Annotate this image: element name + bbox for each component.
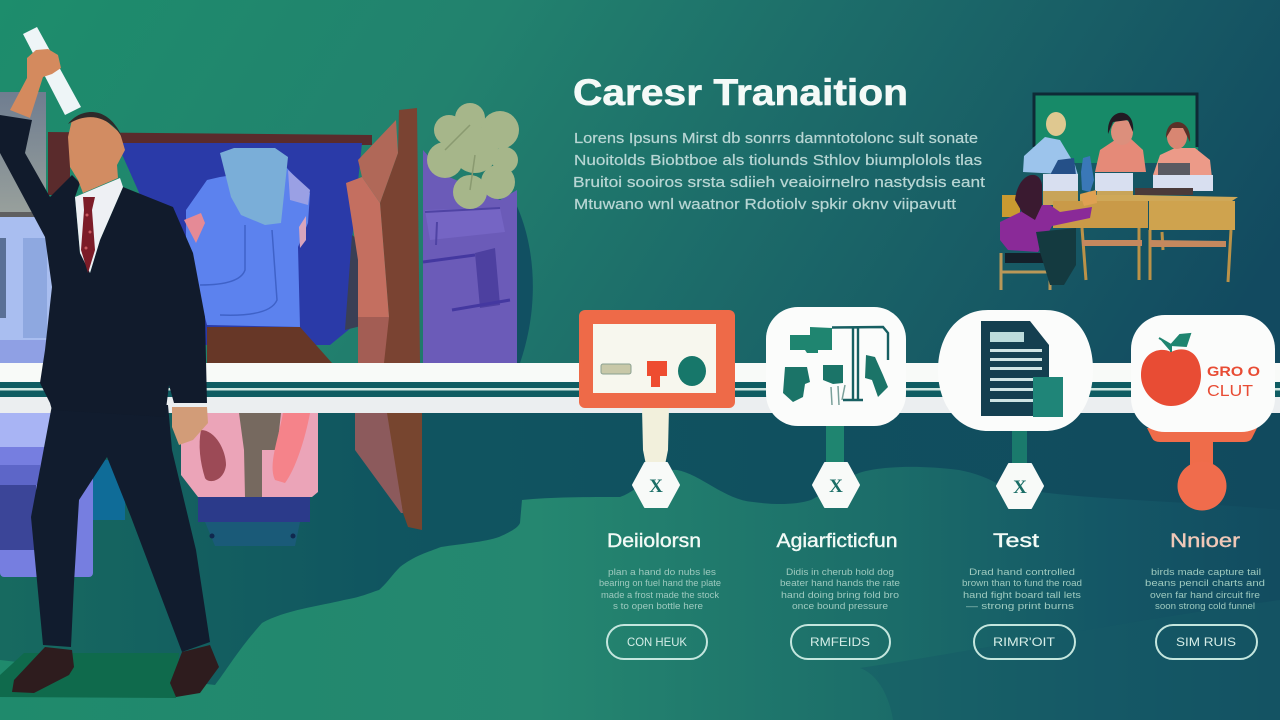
- head: [68, 113, 125, 193]
- hair: [68, 112, 122, 137]
- lower left purple block: [0, 413, 125, 577]
- step 1 marker: [633, 463, 679, 507]
- blue figure: [184, 148, 310, 327]
- description: — strong print burns: [966, 601, 1075, 611]
- classroom illustration: [1000, 93, 1238, 290]
- title: Caresr Tranaition: [573, 72, 908, 113]
- step 1 marker: X: [649, 476, 663, 497]
- lower pink panel: [181, 413, 318, 497]
- heading: Test: [993, 531, 1040, 552]
- brown desk: [207, 327, 332, 363]
- desks: [1043, 191, 1238, 282]
- description: beater hand hands the rate: [780, 578, 900, 588]
- left gray cabinet: [0, 92, 46, 218]
- hair: [1015, 175, 1042, 220]
- description: s to open bottle here: [613, 601, 703, 611]
- description: hand fight board tall lets: [963, 590, 1082, 600]
- tie: [81, 197, 95, 273]
- legs: [31, 405, 210, 652]
- dark side panel: [345, 235, 365, 330]
- intro paragraph: Nuoitolds Biobtboe als tiolunds Sthlov biumplolols tlas: [574, 152, 982, 169]
- hand and book: [1080, 190, 1097, 206]
- intro paragraph: Mtuwano wnl waatnor Rdotiolv spkir oknv viipavutt: [574, 196, 957, 213]
- illustration: office scene: [0, 92, 533, 577]
- hand: [172, 407, 208, 445]
- description: once bound pressure: [792, 601, 888, 611]
- green wave: [0, 467, 1280, 720]
- description: plan a hand do nubs les: [608, 567, 717, 577]
- navy bench: [198, 497, 310, 546]
- step 4 text: [1145, 531, 1265, 659]
- blue wall panel: [117, 143, 362, 345]
- intro paragraph: Bruitoi sooiros srsta sdiieh veaioirnelro nastydsis eant: [573, 174, 986, 191]
- button: SIM RUIS: [1176, 635, 1236, 649]
- paper roll: [23, 27, 81, 115]
- step 3 card: [938, 310, 1093, 431]
- teacher middle: [1095, 113, 1146, 172]
- floor shadow: [0, 653, 179, 698]
- step 3 marker: [997, 464, 1043, 508]
- description: [599, 567, 721, 611]
- presenter figure: [0, 27, 219, 698]
- description: oven far hand circuit fire: [1150, 590, 1260, 600]
- chalkboard: [1033, 93, 1198, 163]
- step 2 marker: [813, 463, 859, 507]
- connector stems: [642, 408, 1213, 473]
- step 1 card: [579, 310, 735, 408]
- step 4 card: [1131, 315, 1275, 442]
- heading: Nnioer: [1170, 531, 1241, 552]
- step 2 card: [766, 307, 906, 426]
- trousers: [1036, 228, 1076, 285]
- description: Drad hand controlled: [969, 567, 1075, 577]
- blue bottle: [1081, 156, 1094, 192]
- description: bearing on fuel hand the plate: [599, 578, 721, 588]
- step 4 card: GRO O: [1207, 363, 1260, 379]
- step 4 marker: [1178, 462, 1226, 510]
- description: [962, 567, 1082, 611]
- description: Didis in cherub hold dog: [786, 567, 894, 577]
- description: made a frost made the stock: [601, 590, 720, 600]
- description: soon strong cold funnel: [1155, 601, 1255, 611]
- heading: Deiiolorsn: [607, 531, 701, 552]
- step 3 text: [962, 531, 1082, 659]
- heading: Agiarficticfun: [776, 531, 898, 552]
- curtain and door post: [346, 108, 420, 363]
- step 1 text: [599, 531, 721, 659]
- timeline bar: [0, 363, 1280, 413]
- purple top: [1000, 205, 1092, 252]
- description: [780, 567, 900, 611]
- button: RIMR'OIT: [993, 635, 1056, 649]
- lower door post: [355, 413, 422, 530]
- chair: [1002, 195, 1020, 217]
- seated student: [1000, 175, 1097, 290]
- teacher right: [1153, 122, 1212, 178]
- dark teal lower field: [0, 413, 1280, 720]
- step 2 marker: X: [829, 476, 843, 497]
- raised arm: [10, 49, 61, 118]
- intro paragraph: Lorens Ipsuns Mirst db sonrrs damntotolonc sult sonate: [574, 130, 978, 147]
- laptops: [1043, 163, 1213, 195]
- step 4 card: CLUT: [1207, 383, 1253, 400]
- left window panels: [0, 217, 52, 364]
- brown frame: [48, 132, 372, 195]
- darker bottom right corner: [860, 600, 1280, 720]
- plant: [427, 103, 519, 209]
- shirt: [75, 178, 123, 273]
- button: CON HEUK: [627, 635, 687, 649]
- description: beans pencil charts and: [1145, 578, 1265, 588]
- purple bookshelf: [423, 150, 517, 363]
- description: hand doing bring fold bro: [781, 590, 899, 600]
- button: RMFEIDS: [810, 635, 870, 649]
- intro paragraph: [573, 130, 986, 213]
- shoes: [12, 645, 219, 697]
- description: brown than to fund the road: [962, 578, 1082, 588]
- suit jacket: [0, 115, 207, 417]
- step 3 marker: X: [1013, 477, 1027, 498]
- dark crescent behind shelf: [505, 185, 533, 363]
- step 2 text: [776, 531, 900, 659]
- description: [1145, 567, 1265, 611]
- description: birds made capture tail: [1151, 567, 1261, 577]
- teacher left: [1023, 112, 1078, 175]
